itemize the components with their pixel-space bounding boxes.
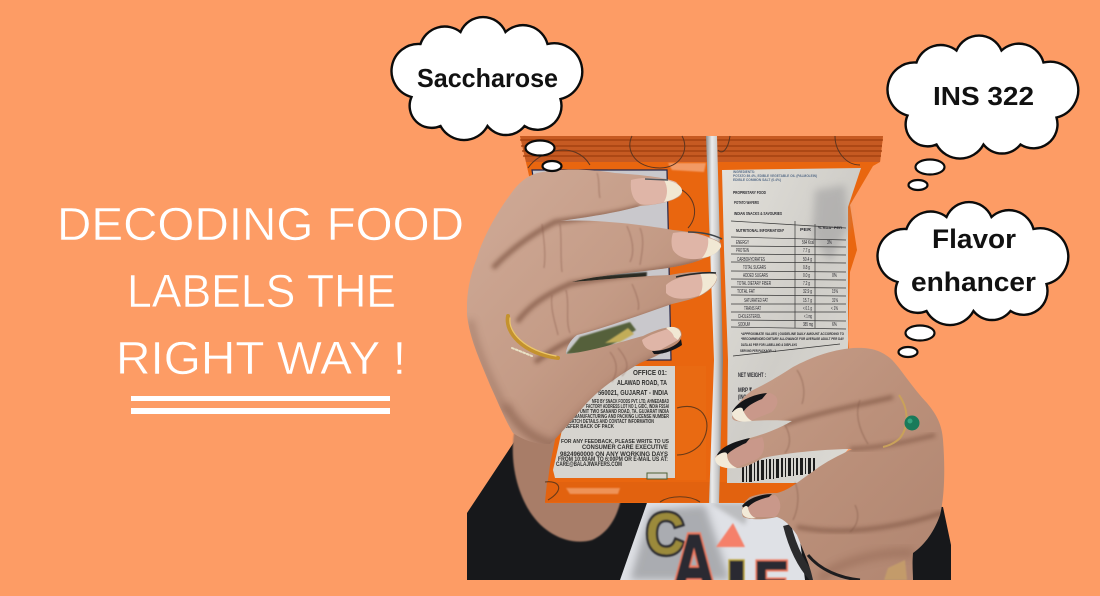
thought dots: Flavor enhancer [898,326,934,357]
nutrition table: 0.0 g [803,273,810,279]
right nutrition label: INDIAN SNACKS & SAVOURIES [734,211,782,216]
nutrition table: PER [800,227,811,232]
nail 4 [642,327,682,354]
right nutrition label: SERVING PER PACKAGE* : 1 [740,349,776,353]
right nutrition label: (INCL. [738,395,750,401]
nutrition table: 3% [827,240,832,246]
nutrition table: SATURATED FAT [744,298,768,304]
knuckle creases [785,370,868,532]
nutrition table: 7.7 g [803,248,810,254]
left hand shading [470,207,700,445]
nutrition table: 385 mg [803,322,813,328]
nutrition table: NUTRITIONAL INFORMATION* [736,228,784,233]
left lower printed label: REFER BACK OF PACK [564,424,614,430]
nutrition table: CARBOHYDRATES [737,257,765,263]
barcode [742,458,815,482]
lower ring [884,560,907,580]
printed t-shirt front [620,503,805,580]
packet highlights [545,482,548,502]
thought bubble: Saccharose: Saccharose [417,63,558,93]
nail 3 [666,272,717,299]
nutrition table: 32.9 g [803,289,812,295]
nutrition table: 0% [832,273,837,279]
nutrition table: 564 Kcal [802,240,814,246]
title double underline [131,396,390,414]
left lower printed label: ALAWAD ROAD, TA [617,378,667,387]
left hand silhouette [467,170,721,444]
nutrition table: PROTEIN [736,248,749,254]
right hand [715,348,944,580]
right nail 3 [742,494,780,518]
title [57,198,464,384]
forearm [513,420,622,542]
nutrition table: 15.7 g [803,298,812,304]
thought dots: Saccharose [526,140,562,171]
nutrition table: 31% [832,298,838,304]
nutrition table: < 1% [831,306,838,312]
right nutrition label: POTATO 89.4%, EDIBLE VEGETABLE OIL (PALMOLEIN) [733,174,817,178]
left lower printed label: FOR ANY FEEDBACK, PLEASE WRITE TO US [561,439,670,445]
left lower printed label: UNIT TWO SANAND ROAD, TA. GUJARAT INDIA [580,409,669,415]
nutrition table: < 1 mg [804,314,812,320]
nutrition table: ENERGY [736,240,749,246]
left lower printed label: CARE@BALAJIWAFERS.COM [556,462,622,468]
thought bubble: Saccharose [392,17,582,140]
nail 1 [631,178,682,205]
right nutrition label: INGREDIENTS: [733,170,755,174]
nutrition table: 0.8 g [803,265,810,271]
shirt letter C inline: C [646,502,684,567]
shirt salmon triangle [716,523,745,547]
right nutrition label: PROPRIETARY FOOD [733,190,766,195]
right nutrition label: DATA AS PER FOR LABELLING & DISPLAYS [741,343,797,347]
title: LABELS THE [127,265,396,317]
left lower printed label [553,366,675,479]
title: DECODING FOOD [57,198,464,250]
nutrition table: 7.2 g [803,281,810,287]
green gem ring [883,395,920,447]
nutrition table: 6% [832,322,837,328]
right nutrition label: POTATO WAFERS [734,200,759,205]
right nutrition label: EDIBLE COMMON SALT (0.4%) [733,178,781,182]
nutrition table: < 0.1 g [803,306,812,312]
nutrition table: TOTAL FAT [737,289,756,295]
left lower printed label: 9824960000 ON ANY WORKING DAYS [560,452,668,458]
left lower printed label: BATCH DETAILS AND CONTACT INFORMATION [569,419,654,425]
black shirt [467,433,951,580]
thought dots: INS 322 [908,160,944,190]
left lower printed label: FROM 10:00AM TO 6:00PM OR E-MAIL US AT: [558,457,668,463]
nutrition table: ADDED SUGARS [743,273,768,279]
gold ring [508,316,558,358]
photo: person holding snack packet [467,136,951,596]
left lower printed label: FACTORY ADDRESS LOT NO 1, GIDC, INDIA FSSAI [586,404,669,410]
title: RIGHT WAY ! [116,332,406,384]
central foil seam [706,136,723,503]
nutrition table: % RDA* PER [818,226,843,230]
snack packet [520,136,883,503]
bracelet strap [808,555,860,580]
nutrition table: 15% [832,289,838,295]
shirt letter C: C [646,502,684,567]
left lower printed label: 560021, GUJARAT - INDIA [598,388,668,397]
nutrition table: 50.4 g [803,257,812,263]
right nutrition label [722,168,861,483]
shadow on nutrition label [812,185,849,262]
nutrition table: TOTAL SUGARS [743,265,766,271]
nutrition table [731,221,846,329]
thought bubble: INS 322: INS 322 [933,81,1034,111]
right hand silhouette [715,348,944,580]
right nail 1 [732,393,767,422]
right nutrition label: NET WEIGHT : [738,373,766,379]
right nutrition label: *APPROXIMATE VALUES | GUIDELINE DAILY AMOUNT ACCORDING TO [741,332,844,336]
product picture on left label [566,322,636,354]
right nutrition label: *RECOMMENDED DIETARY ALLOWANCE FOR AVERAGE ADULT PER DAY [741,337,844,341]
packet body [520,136,883,503]
thought bubble: INS 322 [888,36,1078,159]
left lower printed label: MFD BY SNACK FOODS PVT. LTD, AHMEDABAD [592,399,669,405]
thought bubble: Flavor enhancer: Flavor [932,224,1017,254]
crimped top band [520,136,883,228]
nutrition table: SODIUM [738,322,750,328]
dark band under finger [572,271,648,282]
right nutrition label: MRP ₹ [738,387,752,394]
left lower printed label: CONSUMER CARE EXECUTIVE [582,444,669,451]
right hand shading [785,397,942,580]
nail 2 [672,232,722,259]
wrist bracelet [787,525,815,580]
nutrition table: TOTAL DIETARY FIBER [737,281,771,287]
thought bubble: Flavor enhancer: enhancer [911,267,1036,297]
packet line art [545,406,707,502]
knuckle creases [542,173,643,382]
nutrition table: CHOLESTEROL [738,314,761,320]
left lower printed label: OFFICE 01: [633,368,667,377]
left printed label, upper part [532,170,671,360]
thought bubble: Flavor enhancer [878,202,1068,325]
left lower printed label: MANUFACTURING AND PACKING LICENSE NUMBER [574,414,669,420]
left hand [467,170,722,445]
right nail 2 [715,437,764,468]
nutrition table: TRANS FAT [744,306,761,312]
